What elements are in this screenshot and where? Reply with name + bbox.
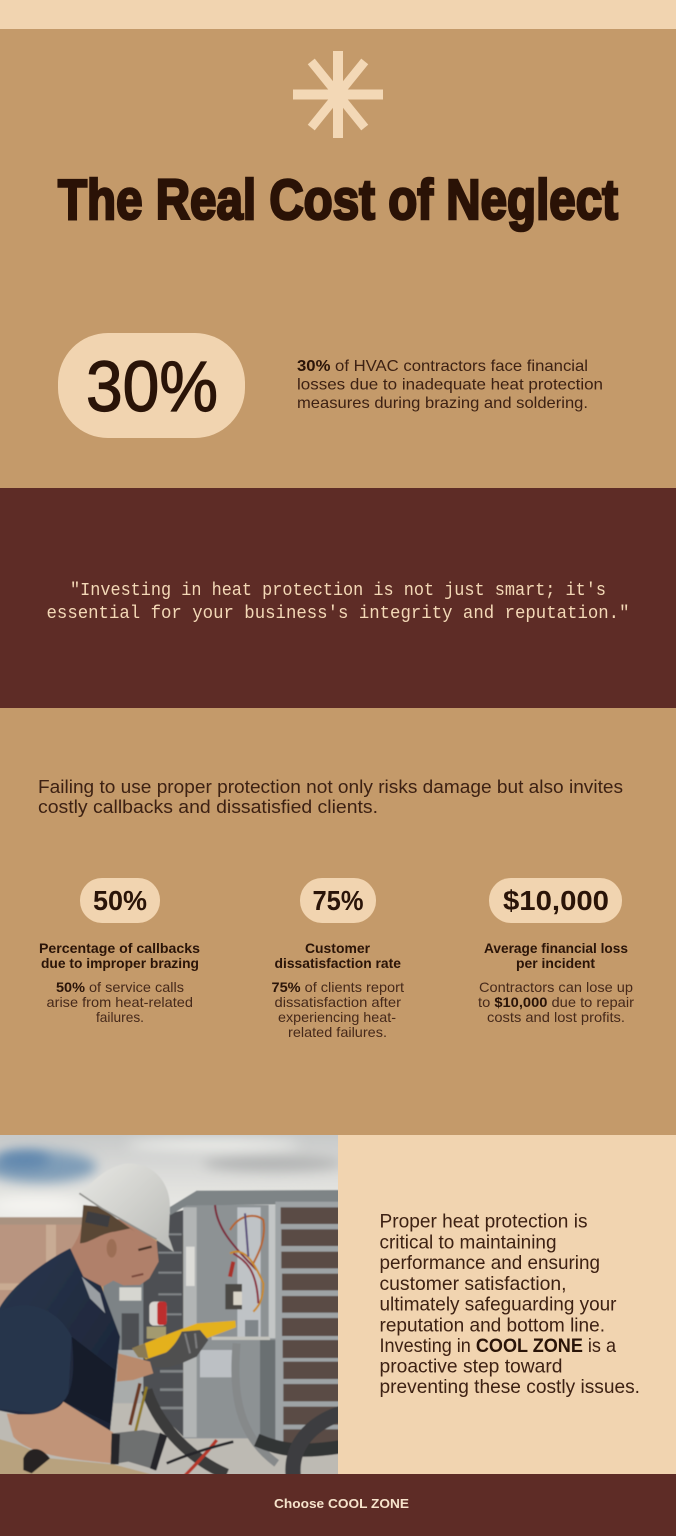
- stat column: 75%: 75% of clients report: [272, 979, 404, 995]
- stat column: $10,000: per incident: [516, 955, 595, 971]
- photo: technician servicing an AC unit: [0, 1132, 343, 1477]
- quote text: essential for your business's integrity and reputation.": [46, 603, 630, 624]
- stat column: 50%: failures.: [96, 1009, 144, 1025]
- unit front: [183, 1205, 280, 1438]
- stat column: 50%: [39, 878, 200, 1025]
- stat pill: 30%: [58, 333, 245, 438]
- stat column: 75%: [272, 878, 404, 1040]
- man: glove on meter: [166, 1330, 208, 1363]
- stat column: 75%: dissatisfaction rate: [274, 955, 401, 971]
- text block: closing statement: ultimately safeguarding your: [380, 1294, 617, 1316]
- man: trousers: [0, 1439, 151, 1474]
- stat column: 75%: Customer: [305, 940, 371, 956]
- stat column: 50%: arise from heat-related: [46, 994, 193, 1010]
- stat column: 50%: due to improper brazing: [41, 955, 199, 971]
- text block: closing statement: preventing these costly issues.: [380, 1376, 640, 1398]
- stat column: 75%: experiencing heat-: [278, 1009, 396, 1025]
- intro text: Failing to use proper protection not only risks damage but also invites: [38, 777, 623, 797]
- man: neck and face: [71, 1210, 159, 1287]
- sky: [0, 1135, 338, 1220]
- text block: 30% description: losses due to inadequate heat protection: [297, 376, 603, 394]
- text block: closing statement: Proper heat protection is: [380, 1211, 588, 1233]
- intro text: costly callbacks and dissatisfied clients.: [38, 797, 378, 817]
- icon: asterisk: [293, 51, 383, 138]
- unit louvered side: [143, 1210, 183, 1437]
- stat column: $10,000: [478, 878, 634, 1025]
- stat column: 75%: related failures.: [288, 1024, 387, 1040]
- stat column: 50%: 50%: [93, 885, 147, 916]
- text block: closing statement: critical to maintaining: [380, 1231, 556, 1253]
- man: helmet: [88, 1172, 174, 1252]
- stat column: $10,000: $10,000: [503, 885, 609, 916]
- back unit panel: [103, 1277, 145, 1350]
- tester: yellow meter: [132, 1321, 236, 1359]
- text block: closing statement: Investing in COOL ZONE is a: [380, 1335, 616, 1357]
- text block: 30% description: 30% of HVAC contractors face financial: [297, 358, 588, 375]
- unit top cap: [169, 1190, 341, 1215]
- text block: closing statement: [380, 1211, 640, 1398]
- building: [0, 1217, 87, 1314]
- text block: closing statement: performance and ensuring: [380, 1252, 600, 1274]
- stat column: 75%: 75%: [312, 885, 364, 916]
- panel: header and 30% statistic: [0, 29, 676, 488]
- stat column: $10,000: Contractors can lose up: [479, 979, 633, 995]
- stat column: 50%: Percentage of callbacks: [39, 940, 200, 956]
- text block: 30% description: [297, 358, 603, 412]
- stat column: 75%: dissatisfaction after: [274, 994, 401, 1010]
- quote text: [46, 580, 630, 624]
- top band: [0, 0, 676, 29]
- stat column: $10,000: Average financial loss: [484, 940, 628, 956]
- text block: closing statement: proactive step toward: [380, 1356, 562, 1378]
- quote text: "Investing in heat protection is not just smart; it's: [70, 580, 606, 601]
- man: forearm right: [117, 1353, 153, 1382]
- man: shirt: [0, 1248, 120, 1432]
- panel: closing text background: [338, 1135, 676, 1474]
- text block: closing statement: reputation and bottom line.: [380, 1315, 605, 1337]
- footer bar: [0, 1474, 676, 1536]
- intro text: [38, 777, 623, 817]
- ground: [0, 1397, 341, 1477]
- panel: callbacks statistics: [0, 708, 676, 1135]
- footer text: Choose COOL ZONE: [274, 1496, 409, 1511]
- stat column: $10,000: to $10,000 due to repair: [478, 994, 634, 1010]
- man: lower arm and glove: [7, 1402, 113, 1463]
- stat pill: 30%: 30%: [86, 348, 218, 427]
- panel: quote: [0, 488, 676, 708]
- stat column: $10,000: costs and lost profits.: [487, 1009, 625, 1025]
- gauge tag: [149, 1302, 167, 1326]
- conduit and hoses: [235, 1343, 277, 1463]
- coil grille: [275, 1202, 341, 1445]
- stat column: 50%: 50% of service calls: [56, 979, 184, 995]
- wiring: [215, 1205, 264, 1312]
- text block: 30% description: measures during brazing and soldering.: [297, 395, 588, 412]
- text block: closing statement: customer satisfaction,: [380, 1273, 566, 1295]
